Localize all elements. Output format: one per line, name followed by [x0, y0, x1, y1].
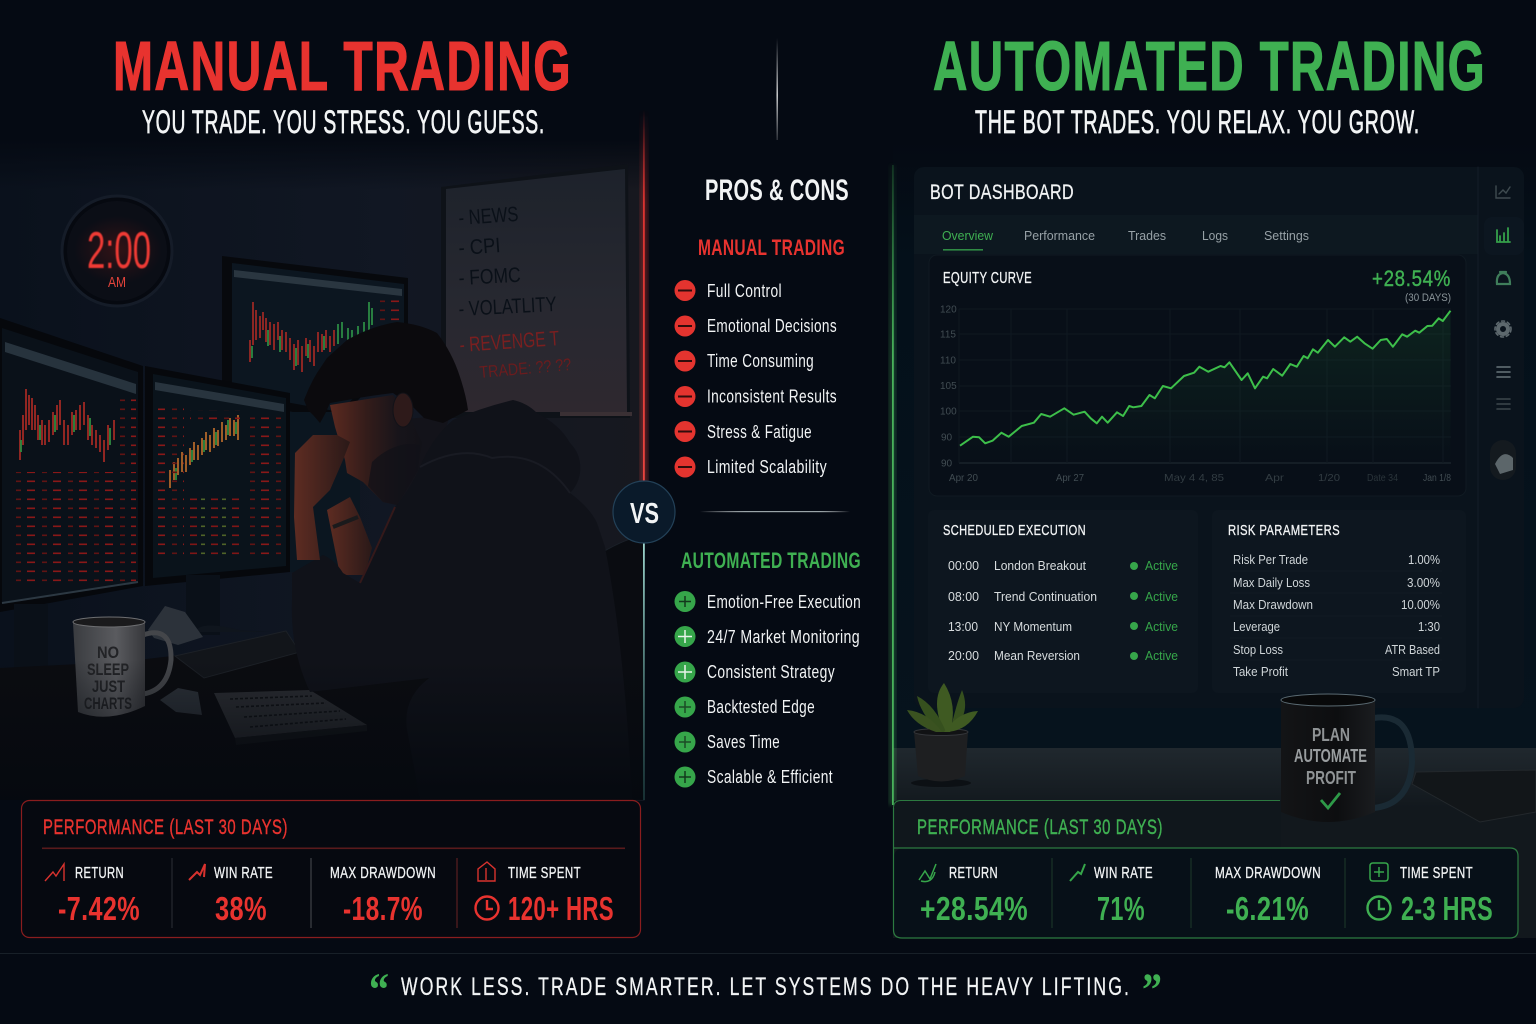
manual trading list: Limited Scalability — [707, 456, 827, 477]
icon: wall clock — [62, 196, 172, 306]
face — [330, 395, 422, 505]
stat: return — [45, 864, 140, 927]
icon: plan automate profit mug — [1281, 694, 1412, 822]
icon: desk plant — [907, 683, 978, 787]
manual trading list: Stress & Fatigue — [707, 421, 812, 442]
panel: automated scene — [893, 140, 1536, 938]
stat: win rate: 38% — [215, 890, 267, 927]
stat: win rate — [189, 864, 273, 927]
list divider — [700, 511, 850, 512]
title: manual trading: MANUAL TRADING — [113, 27, 572, 105]
whiteboard: - REVENGE T — [459, 327, 560, 357]
beard shadow — [368, 444, 420, 505]
panel: risk parameters: Max Drawdown — [1233, 598, 1313, 612]
notebook — [214, 690, 367, 745]
manual trading list: Time Consuming — [707, 350, 814, 371]
neck — [395, 415, 450, 505]
center top divider — [776, 38, 778, 152]
watch — [333, 517, 358, 527]
stat: time spent: 120+ HRS — [508, 890, 614, 927]
dashboard title: BOT DASHBOARD — [930, 181, 1074, 204]
panel: risk parameters: ATR Based — [1385, 643, 1440, 657]
stat: time spent — [476, 862, 614, 927]
stat: max drawdown — [330, 865, 436, 927]
footer tagline: WORK LESS. TRADE SMARTER. LET SYSTEMS DO THE HEAVY LIFTING. — [401, 973, 1131, 1001]
ear — [393, 393, 413, 427]
panel: risk parameters: 10.00% — [1401, 598, 1440, 612]
icon: no sleep mug — [73, 617, 171, 717]
back wall — [893, 140, 1536, 750]
stat: time spent — [1368, 863, 1493, 927]
panel: risk parameters: RISK PARAMETERS — [1228, 522, 1340, 539]
panel: risk parameters: 3.00% — [1407, 576, 1440, 590]
panel: risk parameters: 1:30 — [1418, 620, 1440, 634]
stat: win rate — [1070, 864, 1153, 927]
panel: pros and cons — [674, 174, 861, 788]
hair — [304, 322, 468, 423]
panel: risk parameters: Smart TP — [1392, 665, 1440, 679]
whiteboard: - CPI — [458, 234, 501, 260]
y axis labels: 100 — [940, 406, 957, 418]
icon: plan automate profit mug: AUTOMATE — [1294, 746, 1367, 766]
panel: scheduled execution: 20:00 — [948, 648, 979, 663]
icon: no sleep mug: NO — [97, 643, 119, 662]
tab bar: Settings — [1264, 228, 1309, 243]
chart: equity curve — [929, 255, 1466, 496]
panel: scheduled execution: Mean Reversion — [994, 648, 1080, 663]
chart: equity curve: (30 DAYS) — [1405, 292, 1451, 304]
manual trading list: MANUAL TRADING — [698, 235, 845, 260]
y axis labels: 120 — [940, 304, 957, 316]
y axis labels: 110 — [940, 356, 956, 366]
panel: automated performance — [893, 800, 1518, 938]
panel: risk parameters: Leverage — [1233, 620, 1280, 634]
heading: PROS & CONS — [705, 174, 849, 207]
panel: scheduled execution: London Breakout — [994, 558, 1086, 573]
automated trading list: Backtested Edge — [707, 696, 815, 717]
manual trading list: Emotional Decisions — [707, 315, 837, 336]
stat: max drawdown: -6.21% — [1226, 890, 1309, 927]
footer tagline: “ — [369, 964, 389, 1016]
divider: red and teal versus line — [640, 110, 648, 800]
panel: scheduled execution: NY Momentum — [994, 619, 1072, 634]
equity area — [960, 311, 1450, 463]
panel: risk parameters: Max Daily Loss — [1233, 576, 1310, 590]
footer tagline — [369, 964, 1162, 1016]
second forearm — [327, 497, 372, 575]
column dividers — [1052, 858, 1345, 928]
panel: scheduled execution: Active — [1145, 619, 1178, 634]
panel: scheduled execution: Active — [1145, 558, 1178, 573]
whiteboard: TRADE: ?? ?? — [479, 355, 572, 382]
manual trading list: Inconsistent Results — [707, 386, 837, 406]
panel: scheduled execution: Active — [1145, 589, 1178, 604]
tab bar: Trades — [1128, 228, 1166, 243]
panel: scheduled execution: 00:00 — [948, 558, 979, 573]
stat: max drawdown: MAX DRAWDOWN — [330, 865, 436, 882]
heading: PERFORMANCE (LAST 30 DAYS) — [917, 816, 1163, 839]
automated trading list: Saves Time — [707, 731, 780, 752]
x axis labels: May 4 4, 85 — [1164, 472, 1224, 484]
axis grid — [959, 309, 1451, 463]
panel: scheduled execution — [928, 510, 1198, 693]
stat: max drawdown: -18.7% — [343, 890, 423, 927]
panel: risk parameters: Stop Loss — [1233, 643, 1283, 657]
middle monitor — [145, 366, 290, 586]
panel: scheduled execution: 08:00 — [948, 589, 979, 604]
stat: return: RETURN — [75, 865, 124, 882]
whiteboard: - VOLATLITY — [458, 293, 557, 321]
chart title: EQUITY CURVE — [943, 270, 1032, 287]
tab bar: Performance — [1024, 228, 1095, 243]
icon: wall clock: AM — [108, 274, 126, 291]
manual trading list: Full Control — [707, 280, 782, 301]
top monitor — [222, 256, 408, 420]
x axis labels: Apr 27 — [1056, 472, 1084, 484]
stat: win rate: 71% — [1097, 890, 1145, 927]
hood fold — [420, 453, 570, 493]
stat: return: RETURN — [949, 865, 998, 882]
figure: stressed trader — [292, 322, 632, 800]
icon: plan automate profit mug: PROFIT — [1306, 768, 1356, 788]
icon: crumpled paper — [148, 606, 203, 715]
badge: VS: VS — [630, 498, 659, 530]
tab bar: Logs — [1202, 228, 1228, 243]
stat: return: -7.42% — [58, 890, 140, 927]
icon: wall clock: 2:00 — [87, 222, 151, 280]
stat: time spent: TIME SPENT — [508, 865, 581, 882]
wall top fade — [0, 140, 644, 190]
center column background — [645, 140, 893, 805]
icon: no sleep mug: JUST — [92, 677, 125, 696]
x axis labels: Jan 1/8 — [1423, 472, 1451, 484]
automated trading list: 24/7 Market Monitoring — [707, 626, 860, 647]
keyboard — [175, 631, 300, 678]
right icon rail — [1478, 167, 1524, 708]
subtitle: manual: YOU TRADE. YOU STRESS. YOU GUESS. — [142, 104, 545, 140]
y axis labels: 105 — [940, 381, 957, 392]
vignette — [0, 660, 644, 800]
whiteboard: - FOMC — [458, 264, 521, 290]
stat: return — [919, 864, 1028, 927]
icon: no sleep mug: SLEEP — [87, 660, 129, 679]
stat: time spent: 2-3 HRS — [1401, 890, 1493, 927]
shoulder rim light — [360, 507, 395, 583]
panel: risk parameters — [1212, 510, 1466, 693]
y axis labels: 115 — [940, 330, 956, 340]
panel: risk parameters: Risk Per Trade — [1233, 553, 1308, 567]
panel: risk parameters: Take Profit — [1233, 665, 1288, 679]
hand — [294, 435, 350, 560]
panel: scheduled execution: SCHEDULED EXECUTION — [943, 522, 1086, 539]
notebook — [1412, 770, 1536, 822]
chart return value: +28.54% — [1372, 266, 1451, 291]
panel: bot dashboard — [914, 167, 1524, 708]
monitor behind the trader — [290, 412, 360, 572]
desk — [0, 640, 644, 800]
panel: scheduled execution: 13:00 — [948, 619, 978, 634]
automated trading list: Scalable & Efficient — [707, 766, 833, 787]
hoodie — [292, 400, 632, 800]
divider: green line — [889, 165, 896, 805]
left monitor — [0, 318, 143, 612]
stat: time spent: TIME SPENT — [1400, 865, 1473, 882]
badge: VS — [613, 481, 675, 543]
panel: manual performance — [22, 800, 640, 938]
x axis labels — [949, 472, 1451, 484]
y axis labels — [940, 304, 957, 470]
x axis labels: Date 34 — [1367, 472, 1398, 484]
stat: max drawdown — [1215, 865, 1321, 927]
panel: scheduled execution: Trend Continuation — [994, 589, 1097, 604]
monitor stands — [14, 575, 270, 674]
whiteboard — [441, 164, 632, 418]
tab bar — [914, 215, 1478, 254]
column dividers — [172, 858, 457, 928]
stat: win rate: WIN RATE — [214, 865, 273, 882]
x axis labels: Apr — [1265, 472, 1285, 484]
chair — [540, 535, 644, 800]
heading: PERFORMANCE (LAST 30 DAYS) — [43, 816, 288, 839]
stat: return: +28.54% — [920, 890, 1028, 927]
tab bar: Overview — [942, 228, 994, 243]
icon: no sleep mug: CHARTS — [84, 694, 132, 713]
automated trading list: AUTOMATED TRADING — [681, 548, 861, 573]
x axis labels: Apr 20 — [949, 472, 978, 484]
stat: max drawdown: MAX DRAWDOWN — [1215, 865, 1321, 882]
x axis labels: 1/20 — [1318, 472, 1340, 484]
footer tagline: ” — [1142, 964, 1162, 1016]
automated trading list: Emotion-Free Execution — [707, 591, 861, 612]
automated trading list: Consistent Strategy — [707, 661, 835, 682]
y axis labels: 90 — [941, 458, 953, 470]
footer divider — [0, 953, 1536, 954]
wall — [0, 140, 644, 800]
equity line — [960, 311, 1450, 446]
panel: scheduled execution: Active — [1145, 648, 1178, 663]
automated trading list — [674, 548, 861, 788]
manual trading list — [674, 235, 845, 478]
stat: win rate: WIN RATE — [1094, 865, 1153, 882]
y axis labels: 90 — [941, 432, 953, 444]
desk — [893, 748, 1536, 808]
icon: plan automate profit mug: PLAN — [1312, 725, 1350, 745]
panel: manual trading scene — [0, 140, 644, 800]
whiteboard: - NEWS — [458, 203, 519, 230]
panel: risk parameters: 1.00% — [1408, 553, 1440, 567]
